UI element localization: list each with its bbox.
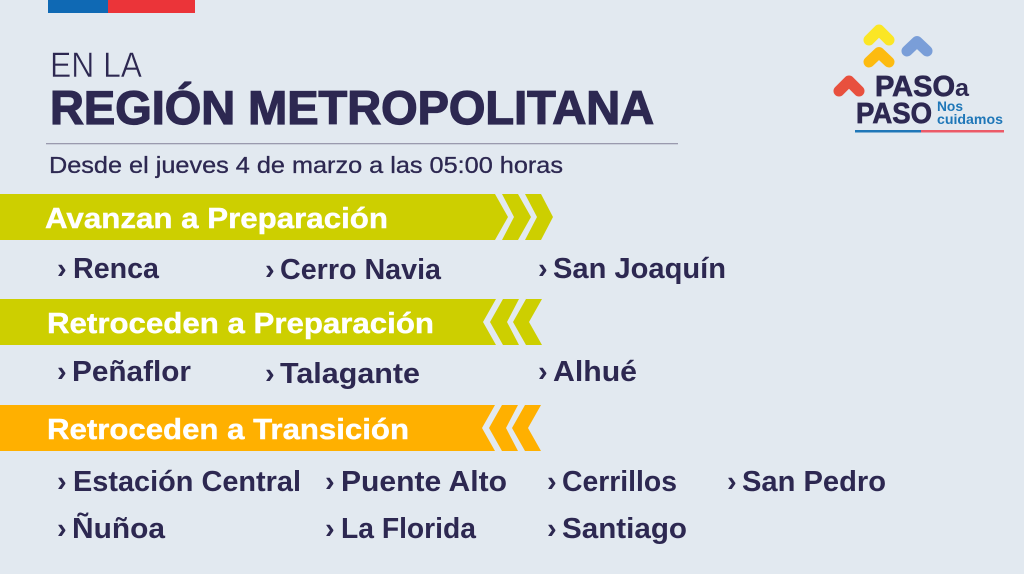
list: Retroceden a Transición: Cerrillos xyxy=(562,466,677,498)
title: REGIÓN METROPOLITANA xyxy=(50,81,654,134)
logo: Paso a Paso xyxy=(839,30,1004,132)
list: Retroceden a Preparación: › xyxy=(57,356,67,388)
list: Retroceden a Transición: › xyxy=(57,513,67,545)
logo: Paso a Paso: a xyxy=(955,75,970,102)
list: Retroceden a Transición xyxy=(57,466,886,545)
list: Retroceden a Transición: › xyxy=(547,466,557,498)
logo: Paso a Paso: Nos xyxy=(937,98,963,114)
list: Retroceden a Transición: Estación Central xyxy=(73,466,301,498)
list: Retroceden a Preparación: Alhué xyxy=(553,356,637,388)
banner: Retroceden a Preparación: Retroceden a Preparación xyxy=(47,308,434,340)
banner: Retroceden a Transición: Retroceden a Transición xyxy=(47,414,409,446)
list: Avanzan a Preparación: › xyxy=(57,253,67,285)
banner: Avanzan a Preparación xyxy=(0,194,553,240)
logo: Paso a Paso: PASO xyxy=(875,71,955,103)
list: Retroceden a Transición: San Pedro xyxy=(742,466,886,498)
list: Avanzan a Preparación xyxy=(57,253,726,286)
list: Retroceden a Transición: › xyxy=(547,513,557,545)
title xyxy=(50,46,654,134)
flag stripe xyxy=(48,0,195,13)
list: Retroceden a Transición: Puente Alto xyxy=(341,466,507,498)
list: Avanzan a Preparación: San Joaquín xyxy=(553,253,726,285)
logo: Paso a Paso: PASO xyxy=(856,98,932,130)
list: Retroceden a Transición: Ñuñoa xyxy=(72,511,166,545)
banner: Retroceden a Preparación xyxy=(0,299,542,345)
list: Retroceden a Transición: › xyxy=(727,466,737,498)
banner: Retroceden a Transición xyxy=(0,405,541,451)
banner: Avanzan a Preparación: Avanzan a Preparación xyxy=(45,203,388,235)
list: Retroceden a Preparación: Peñaflor xyxy=(72,356,191,388)
list: Avanzan a Preparación: › xyxy=(538,253,548,285)
date subtitle: Desde el jueves 4 de marzo a las 05:00 horas xyxy=(49,152,563,178)
list: Retroceden a Transición: Santiago xyxy=(562,513,687,545)
list: Retroceden a Transición: › xyxy=(57,466,67,498)
list: Retroceden a Preparación xyxy=(57,356,637,390)
list: Retroceden a Preparación: › xyxy=(265,358,275,390)
list: Retroceden a Transición: La Florida xyxy=(341,513,477,545)
title: EN LA xyxy=(50,46,143,85)
list: Retroceden a Transición: › xyxy=(325,466,335,498)
list: Avanzan a Preparación: Renca xyxy=(73,253,160,285)
list: Avanzan a Preparación: › xyxy=(265,254,275,286)
logo: Paso a Paso: cuidamos xyxy=(937,111,1003,127)
list: Retroceden a Preparación: › xyxy=(538,356,548,388)
list: Avanzan a Preparación: Cerro Navia xyxy=(280,254,442,286)
list: Retroceden a Transición: › xyxy=(325,513,335,545)
list: Retroceden a Preparación: Talagante xyxy=(280,358,420,390)
